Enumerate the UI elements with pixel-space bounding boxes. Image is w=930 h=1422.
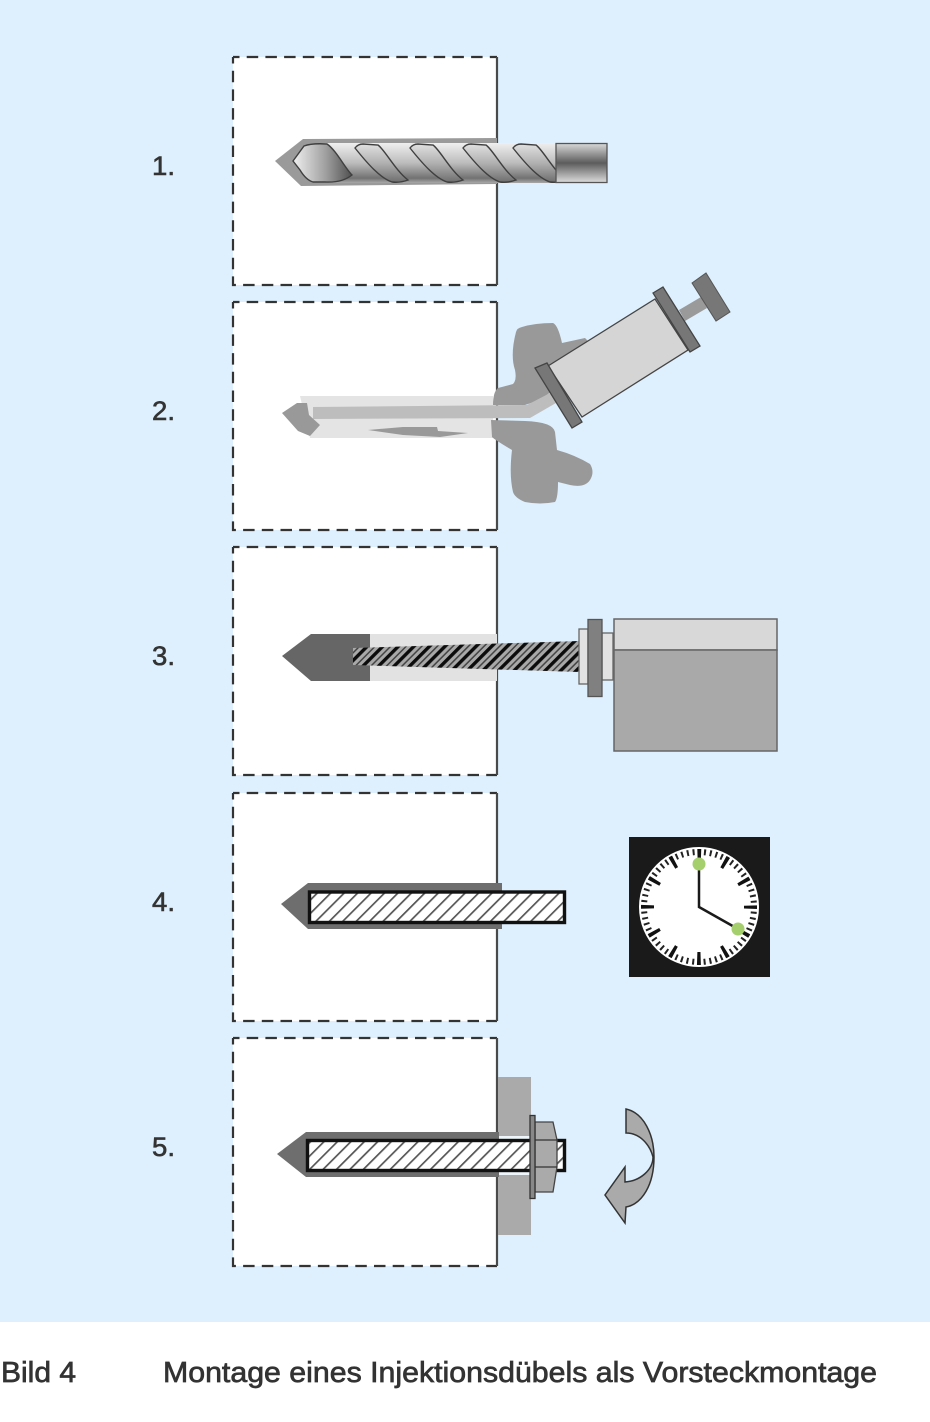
nut — [535, 1122, 557, 1192]
filled hole — [277, 1132, 499, 1177]
illustration: curing time — [281, 883, 564, 929]
hatched threaded rod — [308, 1140, 564, 1170]
attachment plate — [498, 1077, 531, 1235]
panel: step 3 wall section — [233, 547, 497, 775]
drill shaft — [293, 143, 556, 183]
mortar at hole bottom — [282, 403, 320, 436]
drill shank — [556, 144, 607, 182]
step number 5: 5. — [152, 1132, 175, 1162]
step number 2: 2. — [152, 396, 175, 426]
caption text: Montage eines Injektionsdübels als Vorsteckmontage — [163, 1357, 877, 1389]
drilled hole — [275, 138, 497, 186]
overflow mortar upper — [493, 323, 590, 405]
threaded rod — [353, 641, 579, 672]
panel: step 4 wall section — [233, 793, 497, 1021]
drill flutes — [355, 144, 566, 182]
mortar filled tip — [282, 634, 370, 681]
washer — [530, 1116, 535, 1198]
hatched threaded rod — [310, 892, 564, 922]
mixing nozzle — [313, 393, 556, 419]
step number 4: 4. — [152, 887, 175, 917]
panel: step 1 wall section — [233, 57, 497, 285]
arrow: tightening direction — [605, 1109, 654, 1223]
injection gun — [535, 273, 730, 428]
step number 1: 1. — [152, 151, 175, 181]
illustration: fastening the nut — [277, 1077, 564, 1235]
step number 3: 3. — [152, 641, 175, 671]
icon: clock — [629, 837, 770, 977]
mixer collars — [579, 620, 613, 696]
filled hole — [281, 883, 502, 929]
overflow mortar lower — [491, 420, 592, 504]
caption label: Bild 4 — [1, 1357, 76, 1389]
panel: step 5 wall section — [233, 1038, 497, 1266]
hole remaining light — [370, 634, 497, 681]
illustration: drilling the hole — [275, 138, 607, 186]
mortar sliver — [368, 427, 468, 437]
drive unit — [614, 619, 777, 751]
illustration: inserting the sleeve — [282, 619, 777, 751]
drill tip — [293, 144, 352, 182]
cleaned hole — [300, 396, 493, 438]
illustration: injecting mortar — [282, 273, 730, 504]
panel: step 2 wall section — [233, 302, 497, 530]
